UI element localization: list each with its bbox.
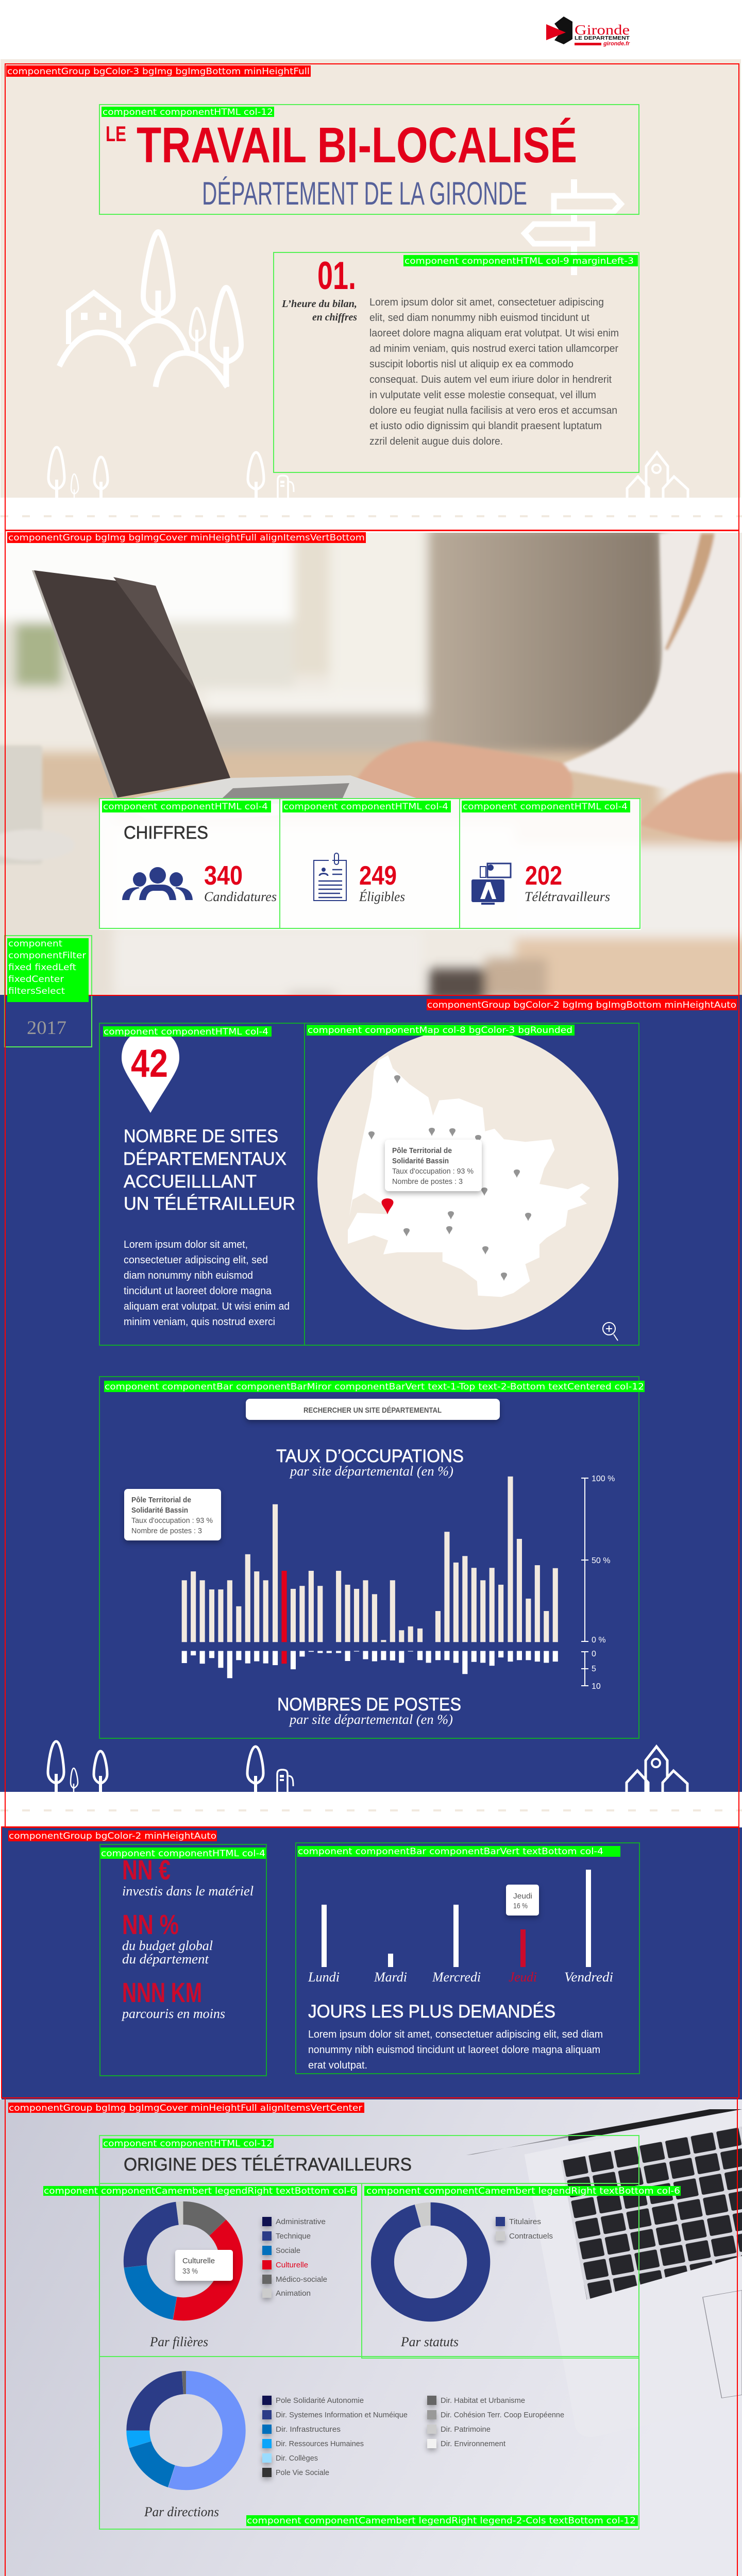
axis: percent: [581, 1475, 615, 1645]
stat: télétravailleurs: [471, 861, 610, 905]
donut: [115, 2193, 251, 2329]
debug labels: component class names: component componentCamembert legendRight textBottom col-6: [366, 2186, 680, 2196]
paragraph: erat volutpat.: [308, 2060, 367, 2071]
debug labels: component class names: componentFilter: [8, 951, 86, 961]
tooltip: culturelle: Culturelle: [182, 2257, 215, 2265]
debug labels: component class names: component componentHTML col-4: [283, 802, 448, 812]
chart tooltip: jeudi: [506, 1885, 539, 1916]
bars: nombre de postes: [182, 1651, 558, 1678]
paragraph: Lorem ipsum dolor sit amet,: [124, 1239, 248, 1250]
paragraph: [308, 2029, 603, 2071]
map pins: [368, 1075, 531, 1281]
debug labels: component class names: component componentHTML col-12: [103, 2139, 273, 2149]
laptop: [133, 775, 416, 798]
legend: Pole Solidarité Autonomie: [276, 2396, 364, 2405]
section: photo of laptop and hands: [0, 526, 742, 1002]
paragraph: elit, sed diam nonummy nibh euismod tincidunt ut: [369, 312, 589, 324]
heading: nombres de postes: par site départemental (en %): [289, 1712, 453, 1727]
debug labels: component class names: componentGroup bgColor-2 minHeightAuto: [9, 1831, 216, 1841]
debug labels: component class names: component componentHTML col-9 marginLeft-3: [404, 256, 634, 266]
year 2017: 2017: [27, 1018, 66, 1039]
icon: people: [122, 867, 193, 900]
hand: [358, 740, 573, 798]
donut: [372, 2203, 490, 2321]
legend: Titulaires: [509, 2217, 541, 2226]
debug labels: component class names: filtersSelect: [8, 986, 65, 996]
axis: postes: 0: [592, 1650, 596, 1658]
tooltip: culturelle: 33 %: [182, 2267, 198, 2276]
mug: [0, 745, 42, 864]
logo: Gironde: [546, 16, 630, 47]
icon: remote worker: [471, 863, 511, 905]
heading: chiffres: CHIFFRES: [124, 823, 208, 843]
panel: bar chart occupation and posts: [124, 1399, 615, 1727]
stat: NNN km: NNN KM: [122, 1977, 202, 2008]
heading: UN TÉLÉTRAILLEUR: [124, 1194, 295, 1214]
legend: Contractuels: [509, 2232, 553, 2241]
chart tooltip: jeudi: 16 %: [513, 1902, 528, 1910]
legend: Dir. Collèges: [276, 2454, 318, 2463]
paragraph: zzril delenit augue duis dolore.: [369, 436, 503, 447]
stat: NN percent: NN %: [122, 1909, 179, 1940]
axis: postes: 5: [592, 1665, 596, 1673]
heading: nombres de postes: [277, 1694, 461, 1727]
debug labels: component class names: component: [8, 939, 62, 949]
legend: Médico-sociale: [276, 2275, 327, 2284]
section: navy sites background: [0, 995, 742, 1792]
stat: NN percent: du département: [122, 1952, 209, 1967]
heading: JOURS LES PLUS DEMANDÉS: [308, 2002, 555, 2022]
axis: percent: 100 %: [592, 1475, 615, 1483]
panel: nombre de sites: [122, 1029, 295, 1328]
bar chart: days: Mercredi: [432, 1970, 481, 1985]
panel: key figures: [121, 1855, 254, 2021]
debug labels: component class names: componentGroup bgImg bgImgCover minHeightFull alignItemsVertBottom: [8, 533, 365, 543]
panel: origine des télétravailleurs: [115, 2155, 564, 2519]
stat: NNN km: parcouris en moins: [121, 2006, 225, 2021]
caption: Par directions: [144, 2504, 219, 2519]
debug labels: component class names: component componentCamembert legendRight textBottom col-6: [44, 2186, 356, 2196]
paragraph: ad minim veniam, quis nostrud exerci tation ullamcorper: [369, 343, 618, 354]
donut chart: par statuts: [372, 2203, 553, 2349]
paragraph: Lorem ipsum dolor sit amet, consectetuer adipiscing: [369, 297, 604, 308]
legend: [262, 2396, 564, 2477]
paragraph: tincidunt ut laoreet dolore magna: [124, 1285, 272, 1297]
legend: Animation: [276, 2289, 311, 2298]
tooltip: culturelle: [175, 2250, 233, 2281]
legend: Dir. Habitat et Urbanisme: [441, 2396, 525, 2405]
subtitle: l'heure du bilan: L’heure du bilan,: [281, 298, 357, 310]
stat: NN euros: investis dans le matériel: [122, 1884, 254, 1899]
icon: pin with 42: 42: [131, 1042, 168, 1086]
donut chart: par directions: [126, 2370, 564, 2519]
heading: taux d'occupations: TAUX D’OCCUPATIONS: [276, 1446, 464, 1466]
map tooltip: Taux d'occupation : 93 %: [392, 1167, 474, 1176]
chart tooltip: jeudi: Jeudi: [513, 1892, 532, 1901]
subtitle: DÉPARTEMENT DE LA GIRONDE: [202, 176, 527, 212]
debug labels: component class names: fixedCenter: [8, 974, 64, 985]
map tooltip: Solidarité Bassin: [392, 1157, 449, 1165]
legend: [262, 2217, 327, 2298]
stat: télétravailleurs: Télétravailleurs: [525, 889, 610, 904]
debug labels: component class names: component componentCamembert legendRight legend-2-Cols textBottom col-12: [247, 2516, 636, 2526]
title: travail bi-localisé: TRAVAIL BI-LOCALISÉ: [137, 117, 577, 173]
debug labels: component class names: component componentHTML col-4: [463, 802, 628, 812]
section: title background: [1, 59, 741, 498]
caption: Par statuts: [400, 2334, 459, 2349]
stat: candidatures: Candidatures: [204, 889, 277, 904]
subtitle: l'heure du bilan: [281, 298, 357, 323]
heading: DÉPARTEMENTAUX: [123, 1149, 286, 1169]
logo: Gironde: gironde.fr: [603, 41, 630, 47]
map: Gironde sites: [317, 1029, 618, 1341]
debug labels: component class names: componentGroup bgImg bgImgCover minHeightFull alignItemsVertCenter: [9, 2103, 362, 2113]
paragraph: [369, 297, 619, 447]
bar chart: days: Vendredi: [564, 1970, 613, 1985]
legend: Dir. Environnement: [441, 2439, 506, 2448]
keyboard keys: [561, 2126, 742, 2300]
icon: document: [314, 853, 346, 901]
illustration: signpost: [525, 179, 621, 275]
chart tooltip: [124, 1489, 221, 1540]
legend: Technique: [276, 2232, 311, 2241]
legend: Dir. Systemes Information et Numéique: [276, 2411, 408, 2419]
heading: ACCUEILLLANT: [124, 1172, 257, 1192]
paragraph: suscipit lobortis nisl ut aliquip ex ea commodo: [369, 359, 574, 370]
heading: [123, 1126, 295, 1214]
bar chart: days: [308, 1870, 613, 1985]
illustration: ground trees, pump and church: [48, 447, 688, 498]
axis: postes: 10: [592, 1682, 601, 1691]
bar chart: days: Lundi: [308, 1970, 340, 1985]
heading: ORIGINE DES TÉLÉTRAVAILLEURS: [124, 2155, 412, 2175]
paragraph: consectetuer adipiscing elit, sed: [124, 1255, 268, 1266]
debug labels: component class names: componentGroup bgColor-3 bgImg bgImgBottom minHeightFull: [7, 66, 310, 77]
heading: NOMBRE DE SITES: [124, 1126, 278, 1146]
stat: NN percent: [122, 1909, 213, 1967]
legend: Sociale: [276, 2246, 300, 2255]
icon: zoom: [603, 1323, 618, 1341]
stat: candidatures: 340: [204, 861, 243, 891]
paragraph: consequat. Duis autem vel eum iriure dolor in hendrerit: [369, 374, 612, 385]
logo: Gironde: Gironde: [575, 22, 630, 38]
paragraph: in vulputate velit esse molestie consequat, vel illum: [369, 389, 596, 401]
paragraph: aliquam erat volutpat. Ut wisi enim ad: [124, 1301, 290, 1312]
chart tooltip: Nombre de postes : 3: [131, 1527, 202, 1535]
illustration: ground trees, pump and church: [48, 1741, 687, 1792]
legend: Pole Vie Sociale: [276, 2468, 329, 2477]
debug labels: component class names: component componentHTML col-12: [103, 107, 273, 117]
logo: Gironde: LE DEPARTEMENT: [575, 36, 630, 41]
paragraph: nonummy nibh euismod tincidunt ut laoreet dolore magna aliquam: [308, 2044, 600, 2056]
heading: nombres de postes: NOMBRES DE POSTES: [277, 1694, 461, 1715]
hair: [665, 533, 715, 650]
stat: candidatures: [122, 861, 277, 904]
heading: taux d'occupations: [276, 1446, 464, 1479]
legend: Dir. Cohésion Terr. Coop Européenne: [441, 2411, 564, 2419]
paragraph: [124, 1239, 290, 1328]
debug labels: component class names: component componentMap col-8 bgColor-3 bgRounded: [308, 1025, 572, 1036]
panel: chiffres: [99, 799, 641, 930]
heading: taux d'occupations: par site départemental (en %): [289, 1464, 453, 1479]
trackpad: [703, 2290, 742, 2398]
bar chart: days: Mardi: [374, 1970, 407, 1985]
bar chart: days: Jeudi: [509, 1970, 537, 1985]
bars: taux d'occupation: [182, 1477, 558, 1642]
donut chart: par filières: [115, 2193, 327, 2349]
paragraph: diam nonummy nibh euismod: [124, 1270, 253, 1281]
axis: postes: [581, 1650, 601, 1691]
debug labels: component class names: componentGroup bgColor-2 bgImg bgImgBottom minHeightAuto: [427, 1000, 736, 1010]
legend: Dir. Infrastructures: [276, 2425, 341, 2434]
search button: [246, 1399, 500, 1420]
legend: Dir. Patrimoine: [441, 2425, 491, 2434]
stat: éligibles: 249: [359, 861, 397, 891]
stat: télétravailleurs: 202: [525, 861, 562, 891]
axis: percent: 50 %: [592, 1556, 610, 1565]
stat: NN euros: NN €: [122, 1855, 171, 1886]
legend: Culturelle: [276, 2261, 308, 2269]
subtitle: l'heure du bilan: en chiffres: [312, 312, 357, 323]
debug labels: component class names: component componentBar componentBarVert textBottom col-4: [298, 1846, 603, 1857]
caption: Par filières: [149, 2334, 208, 2349]
title: LE: LE: [106, 122, 126, 146]
shirt: [551, 533, 742, 804]
stat: éligibles: [314, 853, 405, 904]
legend: Administrative: [276, 2217, 326, 2226]
chart tooltip: Taux d'occupation : 93 %: [131, 1516, 213, 1525]
number 01: 01.: [317, 254, 356, 298]
text block: chapter 01: [281, 254, 619, 447]
section: navy budget and days: [2, 1827, 742, 2099]
stat: NN euros: [122, 1855, 254, 1899]
map tooltip: Pôle Territorial de: [392, 1146, 452, 1155]
laptop body: [525, 2146, 565, 2205]
panel: jours les plus demandés: [308, 1870, 613, 2071]
paragraph: et iusto odio dignissim qui blandit praesent luptatum: [369, 420, 602, 432]
paragraph: Lorem ipsum dolor sit amet, consectetuer adipiscing elit, sed diam: [308, 2029, 603, 2040]
debug labels: component class names: component componentHTML col-4: [101, 1849, 265, 1859]
search button: RECHERCHER UN SITE DÉPARTEMENTAL: [303, 1406, 442, 1415]
title block: [106, 117, 577, 212]
chart tooltip: Solidarité Bassin: [131, 1506, 188, 1515]
legend: [496, 2217, 553, 2241]
map tooltip: [385, 1140, 482, 1191]
illustration: hills, house and trees: [59, 232, 241, 387]
section: photo background with laptop keyboard: [0, 2099, 742, 2576]
paragraph: dolore eu feugiat nulla facilisis at vero eros et accumsan: [369, 405, 617, 416]
stat: NN percent: du budget global: [122, 1938, 213, 1953]
paragraph: minim veniam, quis nostrud exerci: [124, 1316, 275, 1328]
debug labels: component class names: component componentHTML col-4: [103, 802, 268, 812]
legend: Dir. Ressources Humaines: [276, 2439, 364, 2448]
stat: éligibles: Éligibles: [359, 889, 405, 904]
axis: percent: 0 %: [592, 1636, 606, 1645]
paragraph: laoreet dolore magna aliquam erat volutpat. Ut wisi enim: [369, 328, 619, 339]
debug labels: component class names: component componentBar componentBarMiror componentBarVert text-1-Top text-2-Bottom textCentered col-12: [105, 1382, 644, 1392]
map tooltip: Nombre de postes : 3: [392, 1177, 463, 1186]
chart tooltip: Pôle Territorial de: [131, 1496, 191, 1504]
debug labels: component class names: component componentHTML col-4: [104, 1027, 268, 1037]
stat: NNN km: [121, 1977, 225, 2021]
debug labels: component class names: fixed fixedLeft: [8, 962, 76, 973]
donut: [126, 2370, 246, 2491]
icon: pin with 42: [122, 1029, 179, 1113]
